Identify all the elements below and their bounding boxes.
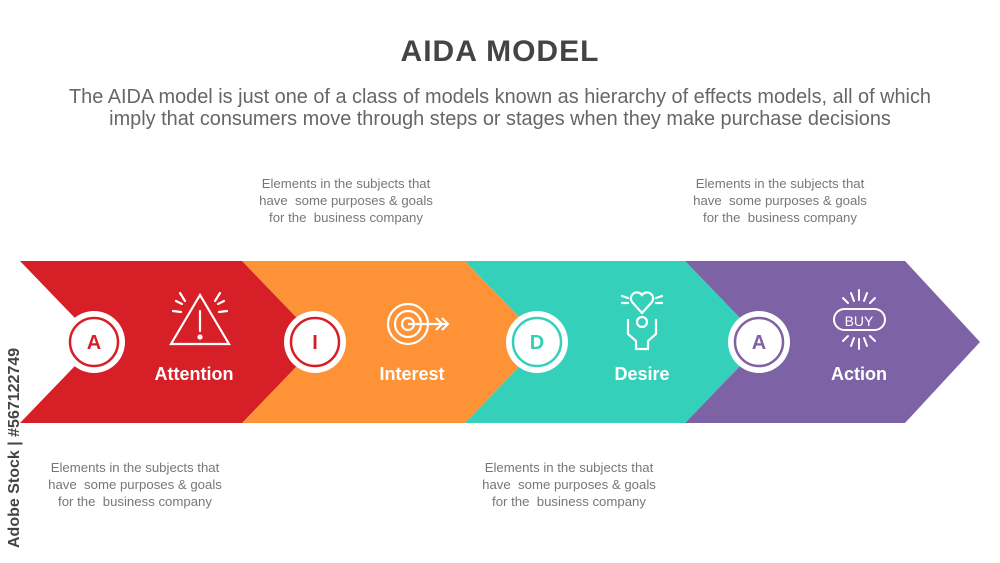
segment: orange	[242, 261, 543, 423]
labels: Desire	[614, 364, 670, 384]
text block: bottom attention: for the business company	[58, 494, 212, 509]
text block: bottom attention: Elements in the subjects that	[51, 460, 219, 475]
circle A: A	[87, 332, 101, 354]
segment: teal	[465, 261, 763, 423]
text block: top interest: Elements in the subjects that	[262, 176, 430, 191]
segment: red	[20, 261, 320, 423]
text block: bottom desire: have some purposes & goals	[482, 477, 656, 492]
labels: Action	[831, 364, 887, 384]
text block: bottom desire: for the business company	[492, 494, 646, 509]
subtitle	[69, 86, 931, 130]
icon: desire	[622, 292, 662, 349]
text block: top interest	[259, 176, 433, 225]
text block: top action	[693, 176, 867, 225]
labels: Interest	[379, 364, 445, 384]
icon: buy: BUY	[845, 313, 874, 329]
text block: top interest: have some purposes & goals	[259, 193, 433, 208]
icon: buy	[834, 290, 885, 349]
watermark id: Adobe Stock | #567122749	[6, 348, 23, 548]
text block: top action: for the business company	[703, 210, 857, 225]
circle D: D	[530, 332, 544, 354]
labels	[155, 364, 887, 384]
circle A2: A	[752, 332, 766, 354]
circle A	[63, 311, 125, 373]
circle A2	[728, 311, 790, 373]
text block: top interest: for the business company	[269, 210, 423, 225]
icon: warning	[171, 293, 229, 344]
labels: Attention	[155, 364, 233, 384]
segment: purple	[685, 261, 980, 423]
text block: bottom desire	[482, 460, 656, 509]
subtitle: imply that consumers move through steps or stages when they make purchase decisions	[109, 108, 891, 130]
subtitle: The AIDA model is just one of a class of models known as hierarchy of effects models, all of which	[69, 86, 931, 108]
text block: bottom attention: have some purposes & goals	[48, 477, 222, 492]
text block: bottom desire: Elements in the subjects that	[485, 460, 653, 475]
icon: target	[388, 304, 448, 344]
circle I: I	[312, 332, 318, 354]
text block: top action: have some purposes & goals	[693, 193, 867, 208]
text block: top action: Elements in the subjects that	[696, 176, 864, 191]
text block: bottom attention	[48, 460, 222, 509]
circle D	[506, 311, 568, 373]
title: AIDA MODEL	[401, 35, 599, 68]
circle I	[284, 311, 346, 373]
